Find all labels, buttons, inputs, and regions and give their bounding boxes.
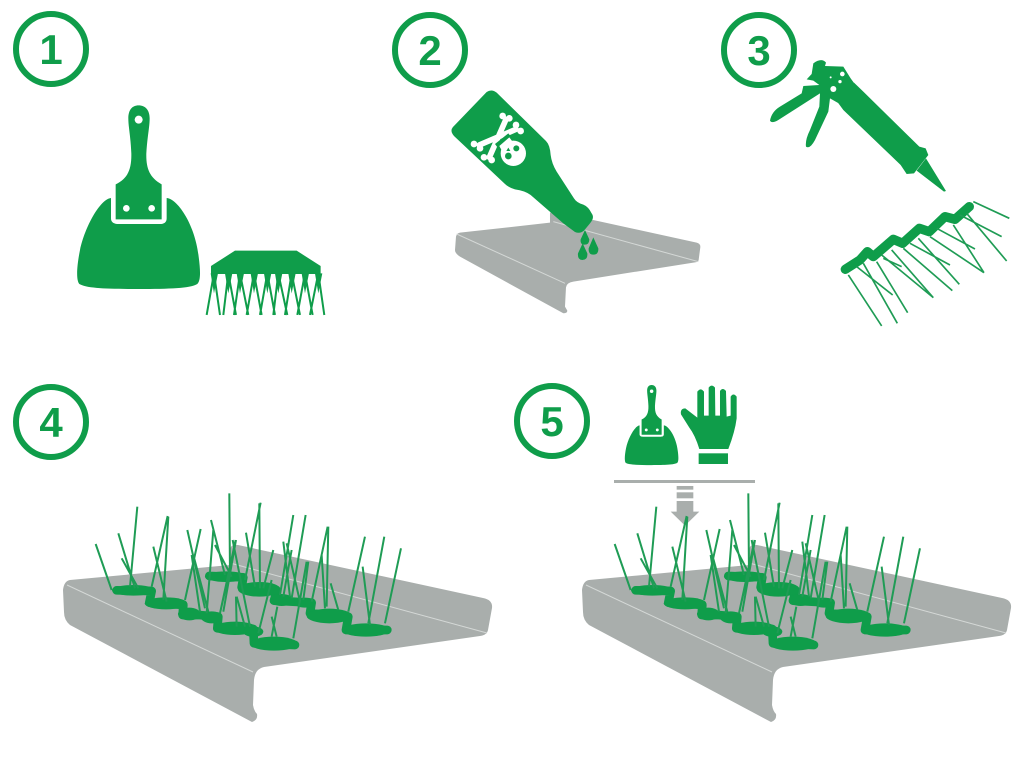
step 5 number badge bbox=[517, 386, 587, 456]
icon: small scraper bbox=[625, 385, 678, 465]
window sill bbox=[455, 212, 700, 313]
icon: wire brush bbox=[207, 251, 324, 315]
icon: skull and crossbones bbox=[471, 113, 526, 166]
window sill with spikes bbox=[63, 493, 492, 722]
icon: poison bottle bbox=[451, 90, 593, 233]
step 1 number badge bbox=[16, 14, 86, 84]
arrow: down bbox=[671, 486, 699, 526]
window sill with spikes bbox=[582, 493, 1011, 722]
step 1 number badge: 1 bbox=[39, 26, 63, 73]
sill highlight lines and bottle bbox=[451, 90, 698, 283]
icon: caulking gun bbox=[770, 60, 946, 192]
step 4 number badge: 4 bbox=[39, 399, 63, 446]
step 2 number badge bbox=[395, 15, 465, 85]
step 4 number badge bbox=[16, 387, 86, 457]
icon: scraper bbox=[77, 105, 200, 289]
divider line bbox=[614, 480, 755, 483]
icon: poison drops bbox=[578, 230, 598, 260]
icon: spike strip bbox=[845, 202, 1009, 326]
step 3 number badge bbox=[724, 15, 794, 85]
step 3 number badge: 3 bbox=[747, 27, 771, 74]
step 5 number badge: 5 bbox=[540, 398, 564, 445]
step 2 number badge: 2 bbox=[418, 27, 442, 74]
icon: glove bbox=[681, 386, 737, 464]
